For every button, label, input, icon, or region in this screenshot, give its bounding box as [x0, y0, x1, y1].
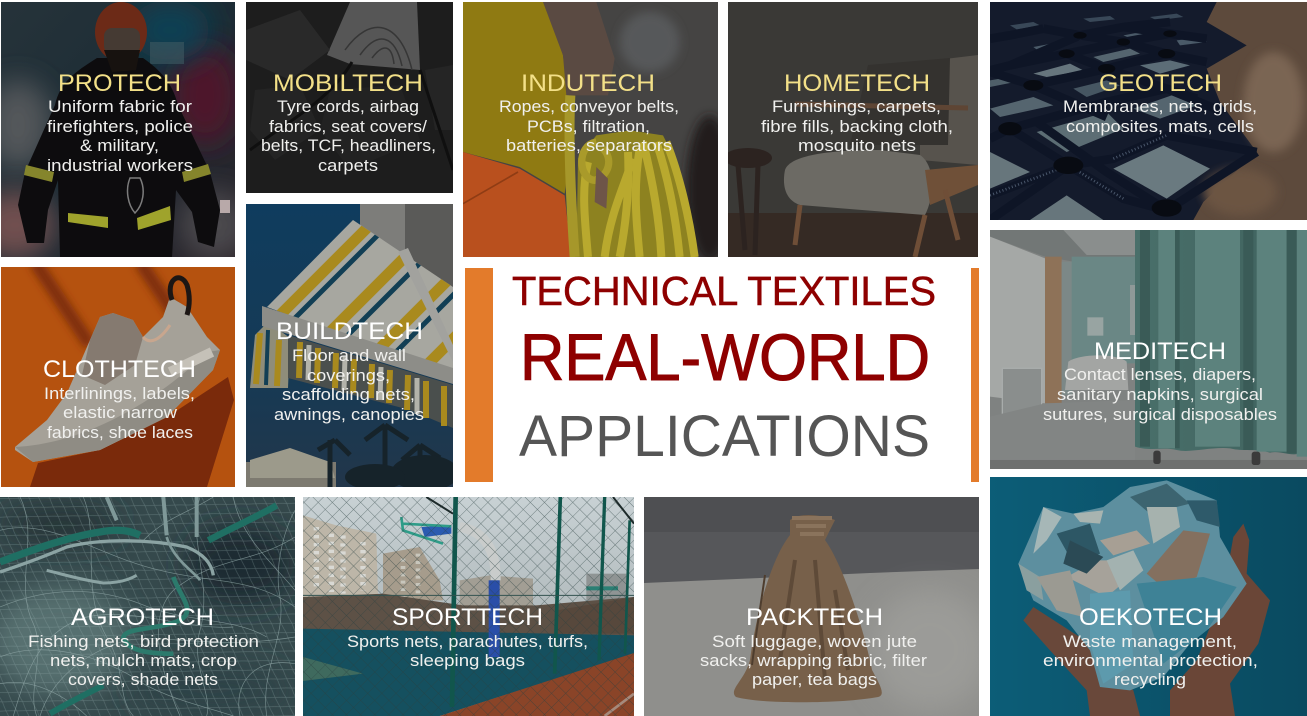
description: MEDITECH: [1043, 366, 1277, 424]
accent bar: left: [465, 268, 493, 482]
description: AGROTECH: covers, shade nets: [68, 671, 218, 689]
description: BUILDTECH: [274, 347, 424, 424]
description: OEKOTECH: recycling: [1114, 671, 1186, 689]
heading: OEKOTECH: OEKOTECH: [1079, 604, 1222, 631]
description: AGROTECH: [28, 633, 259, 689]
panel: GEOTECH: [990, 2, 1307, 220]
heading: HOMETECH: HOMETECH: [784, 70, 930, 97]
description: PACKTECH: [700, 633, 928, 689]
heading: GEOTECH: GEOTECH: [1099, 70, 1222, 97]
panel: INDUTECH: [463, 2, 733, 262]
description: HOMETECH: Furnishings, carpets,: [772, 98, 941, 116]
heading: INDUTECH: INDUTECH: [521, 70, 655, 97]
description: MOBILTECH: carpets: [318, 157, 378, 175]
heading: PACKTECH: PACKTECH: [746, 604, 883, 631]
description: PROTECH: industrial workers: [47, 157, 193, 175]
description: HOMETECH: fibre fills, backing cloth,: [761, 118, 953, 136]
description: PROTECH: & military,: [80, 137, 159, 155]
description: SPORTTECH: [347, 633, 588, 670]
description: MEDITECH: Contact lenses, diapers,: [1064, 366, 1256, 384]
heading: MEDITECH: MEDITECH: [1094, 338, 1226, 365]
panel: HOMETECH: [724, 2, 978, 257]
accent bar: right: [971, 268, 979, 482]
description: GEOTECH: composites, mats, cells: [1066, 118, 1254, 136]
description: INDUTECH: Ropes, conveyor belts,: [499, 98, 679, 116]
description: INDUTECH: PCBs, filtration,: [527, 118, 650, 136]
description: SPORTTECH: sleeping bags: [410, 652, 525, 670]
photo: firefighter: [0, 0, 250, 260]
description: PACKTECH: sacks, wrapping fabric, filter: [700, 652, 928, 670]
photo: yellow ropes: [463, 2, 733, 262]
description: HOMETECH: [761, 98, 953, 155]
description: OEKOTECH: [1043, 633, 1258, 689]
description: CLOTHTECH: Interlinings, labels,: [44, 385, 195, 403]
description: MOBILTECH: Tyre cords, airbag: [277, 98, 419, 116]
description: OEKOTECH: Waste management,: [1063, 633, 1237, 651]
description: GEOTECH: [1063, 98, 1257, 136]
description: BUILDTECH: scaffolding nets,: [282, 386, 415, 404]
description: INDUTECH: [499, 98, 679, 155]
description: SPORTTECH: Sports nets, parachutes, turfs,: [347, 633, 588, 651]
description: BUILDTECH: awnings, canopies: [274, 406, 424, 424]
panel: MEDITECH: [990, 230, 1307, 469]
panel: BUILDTECH: [246, 204, 453, 487]
description: MOBILTECH: fabrics, seat covers/: [269, 118, 427, 136]
description: HOMETECH: mosquito nets: [798, 137, 916, 155]
description: CLOTHTECH: elastic narrow: [63, 404, 177, 422]
photo: hospital room with curtain: [990, 230, 1307, 469]
photo: hands holding paper: [990, 477, 1307, 716]
title: TECHNICAL TEXTILES: TECHNICAL TEXTILES: [512, 268, 936, 314]
description: MOBILTECH: belts, TCF, headliners,: [261, 137, 436, 155]
description: MEDITECH: sutures, surgical disposables: [1043, 406, 1277, 424]
title: REAL-WORLD: REAL-WORLD: [520, 321, 930, 394]
heading: MOBILTECH: MOBILTECH: [273, 70, 423, 97]
photo: jute sack: [644, 497, 990, 716]
title: APPLICATIONS: APPLICATIONS: [519, 404, 930, 469]
heading: PROTECH: PROTECH: [58, 70, 181, 97]
photo: fishing nets: [0, 497, 295, 716]
description: AGROTECH: nets, mulch mats, crop: [50, 652, 237, 670]
description: MOBILTECH: [261, 98, 436, 175]
photo: sports court behind fence: [303, 497, 634, 716]
panel: MOBILTECH: [246, 2, 453, 193]
panel: OEKOTECH: [990, 477, 1307, 716]
description: AGROTECH: Fishing nets, bird protection: [28, 633, 259, 651]
description: PROTECH: [47, 98, 193, 175]
title panel: [465, 268, 979, 482]
description: OEKOTECH: environmental protection,: [1043, 652, 1258, 670]
photo: geocell grid on sand: [990, 2, 1307, 220]
photo: sneaker: [1, 262, 235, 487]
heading: SPORTTECH: SPORTTECH: [392, 604, 543, 631]
heading: CLOTHTECH: CLOTHTECH: [43, 356, 196, 383]
description: PROTECH: Uniform fabric for: [48, 98, 193, 116]
heading: BUILDTECH: BUILDTECH: [276, 318, 423, 345]
photo: tyre: [246, 2, 453, 193]
description: INDUTECH: batteries, separators: [506, 137, 672, 155]
panel: PACKTECH: [644, 497, 990, 716]
heading: AGROTECH: AGROTECH: [71, 604, 214, 631]
panel: PROTECH: [0, 0, 250, 260]
description: MEDITECH: sanitary napkins, surgical: [1057, 386, 1263, 404]
description: PROTECH: firefighters, police: [47, 118, 193, 136]
photo: armchair: [724, 2, 978, 257]
panel: SPORTTECH: [303, 497, 634, 716]
description: BUILDTECH: coverings,: [307, 367, 390, 385]
description: BUILDTECH: Floor and wall: [292, 347, 406, 365]
description: GEOTECH: Membranes, nets, grids,: [1063, 98, 1257, 116]
description: CLOTHTECH: [44, 385, 195, 442]
description: CLOTHTECH: fabrics, shoe laces: [47, 424, 193, 442]
description: PACKTECH: paper, tea bags: [752, 671, 877, 689]
photo: striped awning: [246, 204, 453, 487]
description: PACKTECH: Soft luggage, woven jute: [712, 633, 917, 651]
panel: AGROTECH: [0, 497, 295, 716]
panel: CLOTHTECH: [1, 262, 235, 487]
